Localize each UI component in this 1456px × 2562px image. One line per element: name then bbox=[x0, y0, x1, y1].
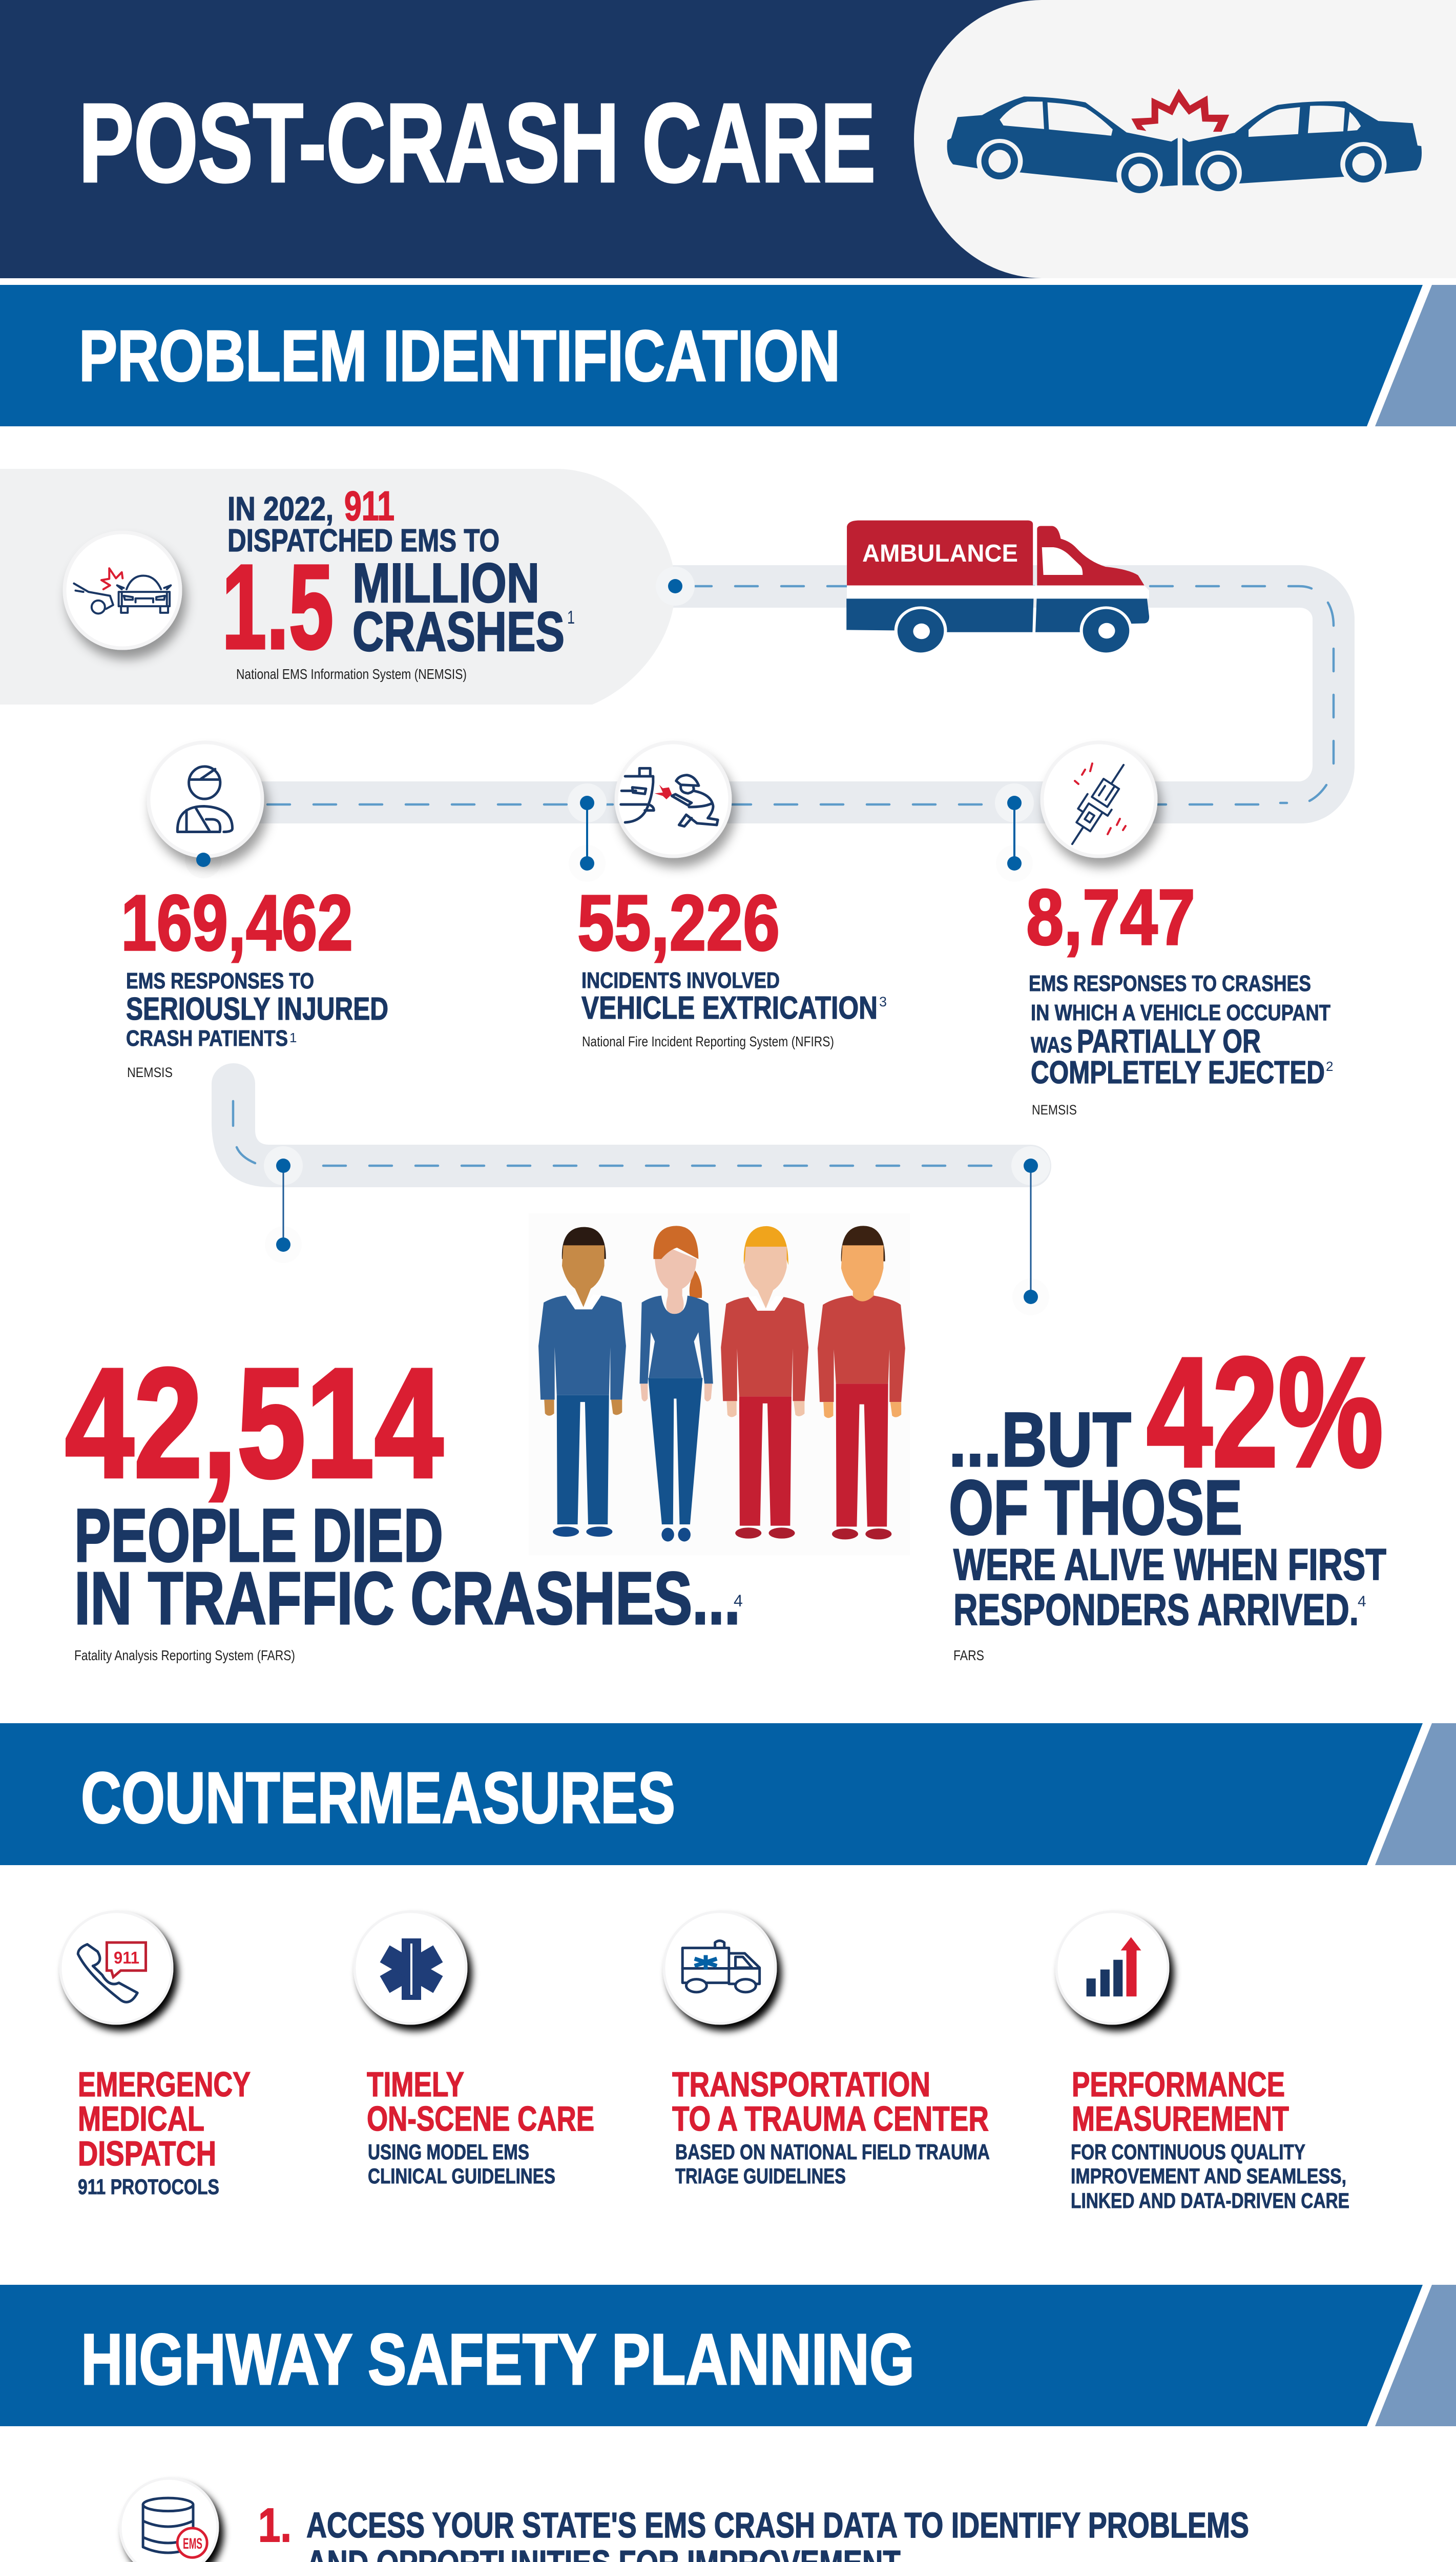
person 3 bbox=[721, 1226, 808, 1539]
person 4 bbox=[818, 1226, 905, 1539]
icon: ambulance outline bbox=[664, 1912, 776, 2023]
countermeasure: transportation to a trauma center: TRIAGE GUIDELINES bbox=[675, 2164, 846, 2188]
road path: lower route bbox=[212, 1063, 1051, 1315]
countermeasure: performance measurement: IMPROVEMENT AND SEAMLESS, bbox=[1071, 2164, 1346, 2188]
header light panel bbox=[914, 0, 1456, 278]
countermeasure: emergency medical dispatch: DISPATCH bbox=[78, 2134, 216, 2173]
icon: database EMS: EMS bbox=[183, 2535, 202, 2552]
countermeasure: transportation to a trauma center: TRANSPORTATION bbox=[672, 2065, 930, 2104]
stat: people died: 42,514 bbox=[65, 1336, 444, 1510]
key number: 1.5 million crashes: 1 bbox=[567, 607, 575, 628]
road path: upper route bbox=[236, 565, 1355, 823]
icon: vehicle extrication badge bbox=[616, 742, 730, 856]
ambulance label: AMBULANCE bbox=[862, 540, 1018, 567]
illustration: four people bbox=[529, 1213, 910, 1555]
section band: problem identification bbox=[0, 285, 1456, 426]
stat: seriously injured patients: 169,462 bbox=[121, 879, 353, 967]
countermeasure: emergency medical dispatch: MEDICAL bbox=[78, 2099, 204, 2138]
icon: star of life bbox=[355, 1912, 466, 2023]
step 1: access EMS crash data: 1. bbox=[258, 2498, 292, 2552]
person 1 bbox=[538, 1227, 626, 1537]
countermeasure: timely on-scene care: USING MODEL EMS bbox=[368, 2140, 529, 2164]
icon: phone 911 bbox=[60, 1912, 172, 2023]
stat: vehicle extrication incidents bbox=[577, 879, 887, 1049]
stat: occupant ejected: IN WHICH A VEHICLE OCCUPANT bbox=[1031, 1000, 1330, 1025]
stat: seriously injured patients: SERIOUSLY INJURED bbox=[126, 991, 388, 1027]
stat: alive when responders arrived: FARS bbox=[953, 1647, 984, 1663]
icon: ambulance bbox=[846, 521, 1149, 654]
heading text: in 2022 911 dispatched EMS: 911 bbox=[344, 483, 394, 529]
countermeasure: performance measurement: LINKED AND DATA-DRIVEN CARE bbox=[1071, 2188, 1349, 2213]
stat: occupant ejected: COMPLETELY EJECTED bbox=[1031, 1055, 1325, 1090]
countermeasure: timely on-scene care: ON-SCENE CARE bbox=[367, 2099, 594, 2138]
stat: vehicle extrication incidents: 3 bbox=[879, 994, 887, 1009]
key number: 1.5 million crashes: CRASHES bbox=[352, 601, 565, 663]
countermeasure: performance measurement: FOR CONTINUOUS QUALITY bbox=[1071, 2140, 1305, 2164]
icon: two cars crashing bbox=[947, 89, 1422, 197]
stat: occupant ejected: WAS bbox=[1031, 1032, 1072, 1058]
step 1: access EMS crash data bbox=[120, 2478, 1249, 2562]
stat: people died: 4 bbox=[734, 1592, 743, 1610]
heading text: in 2022 911 dispatched EMS: DISPATCHED EMS TO bbox=[227, 523, 500, 559]
key number: 1.5 million crashes: MILLION bbox=[352, 552, 539, 614]
stat: alive when responders arrived: 4 bbox=[1358, 1593, 1366, 1610]
connectors: route markers bbox=[185, 783, 1034, 882]
countermeasure: emergency medical dispatch: EMERGENCY bbox=[78, 2065, 251, 2104]
stat: seriously injured patients: EMS RESPONSES TO bbox=[126, 968, 314, 994]
stat: occupant ejected: 8,747 bbox=[1026, 873, 1195, 961]
section band: problem identification: PROBLEM IDENTIFICATION bbox=[79, 315, 840, 396]
panel: 911 dispatch statistic bbox=[0, 469, 695, 705]
countermeasure: emergency medical dispatch: 911 PROTOCOLS bbox=[78, 2175, 219, 2199]
start dot bbox=[656, 567, 695, 606]
icon: seat belt badge bbox=[1042, 742, 1156, 856]
stat: alive when responders arrived: 42% bbox=[1147, 1326, 1383, 1499]
countermeasure: performance measurement: MEASUREMENT bbox=[1072, 2099, 1289, 2138]
stat: vehicle extrication incidents: VEHICLE EXTRICATION bbox=[581, 990, 878, 1026]
stat: people died bbox=[65, 1336, 743, 1663]
section band: highway safety planning: HIGHWAY SAFETY PLANNING bbox=[81, 2319, 914, 2400]
countermeasure: performance measurement: PERFORMANCE bbox=[1072, 2065, 1285, 2104]
stat: seriously injured patients: 1 bbox=[289, 1030, 297, 1045]
stat: people died: IN TRAFFIC CRASHES... bbox=[74, 1557, 740, 1640]
stat: seriously injured patients: NEMSIS bbox=[127, 1065, 173, 1080]
key number: 1.5 million crashes: 1.5 bbox=[222, 540, 334, 674]
countermeasure: transportation to a trauma center: BASED ON NATIONAL FIELD TRAUMA bbox=[675, 2140, 990, 2164]
section band: countermeasures: COUNTERMEASURES bbox=[81, 1757, 675, 1838]
stat: occupant ejected bbox=[1026, 873, 1333, 1118]
stat: people died: PEOPLE DIED bbox=[74, 1494, 443, 1578]
icon: phone 911: 911 bbox=[114, 1948, 139, 1967]
countermeasure: timely on-scene care: TIMELY bbox=[367, 2065, 464, 2104]
stat: alive when responders arrived bbox=[949, 1326, 1386, 1663]
stat: vehicle extrication incidents: 55,226 bbox=[577, 879, 780, 967]
stat: seriously injured patients: CRASH PATIENTS bbox=[126, 1026, 288, 1051]
stat: vehicle extrication incidents: National Fire Incident Reporting System (NFIRS) bbox=[582, 1034, 834, 1049]
stat: people died: Fatality Analysis Reporting System (FARS) bbox=[74, 1647, 295, 1663]
stat: occupant ejected: PARTIALLY OR bbox=[1077, 1023, 1261, 1060]
countermeasure: transportation to a trauma center: TO A TRAUMA CENTER bbox=[672, 2099, 989, 2138]
countermeasure: performance measurement bbox=[1056, 1912, 1349, 2213]
header banner bbox=[0, 0, 1456, 278]
countermeasure: timely on-scene care: CLINICAL GUIDELINES bbox=[368, 2164, 555, 2188]
heading text: in 2022 911 dispatched EMS: IN 2022, bbox=[227, 490, 334, 527]
stat: occupant ejected: EMS RESPONSES TO CRASHES bbox=[1029, 971, 1311, 996]
icon: database EMS bbox=[120, 2478, 218, 2562]
source: NEMSIS: National EMS Information System (NEMSIS) bbox=[236, 666, 467, 682]
countermeasure: transportation to a trauma center bbox=[664, 1912, 990, 2188]
stat: seriously injured patients bbox=[121, 879, 388, 1080]
icon: rising bar chart bbox=[1056, 1912, 1168, 2023]
countermeasure: emergency medical dispatch bbox=[60, 1912, 251, 2199]
stat: occupant ejected: NEMSIS bbox=[1032, 1102, 1077, 1118]
section band: highway safety planning bbox=[0, 2285, 1456, 2426]
icon: injured patient badge bbox=[149, 742, 262, 867]
person 2 bbox=[639, 1226, 713, 1541]
stat: vehicle extrication incidents: INCIDENTS INVOLVED bbox=[581, 968, 780, 993]
section band: countermeasures bbox=[0, 1723, 1456, 1865]
countermeasure: timely on-scene care bbox=[355, 1912, 594, 2188]
stat: alive when responders arrived: ...BUT bbox=[949, 1396, 1131, 1482]
icon: car crash badge bbox=[65, 532, 180, 648]
stat: occupant ejected: 2 bbox=[1326, 1059, 1333, 1074]
title: POST-CRASH CARE bbox=[79, 81, 876, 205]
heading text: in 2022 911 dispatched EMS bbox=[227, 483, 500, 559]
stat: alive when responders arrived: OF THOSE bbox=[949, 1464, 1242, 1551]
key number: 1.5 million crashes bbox=[222, 540, 575, 674]
